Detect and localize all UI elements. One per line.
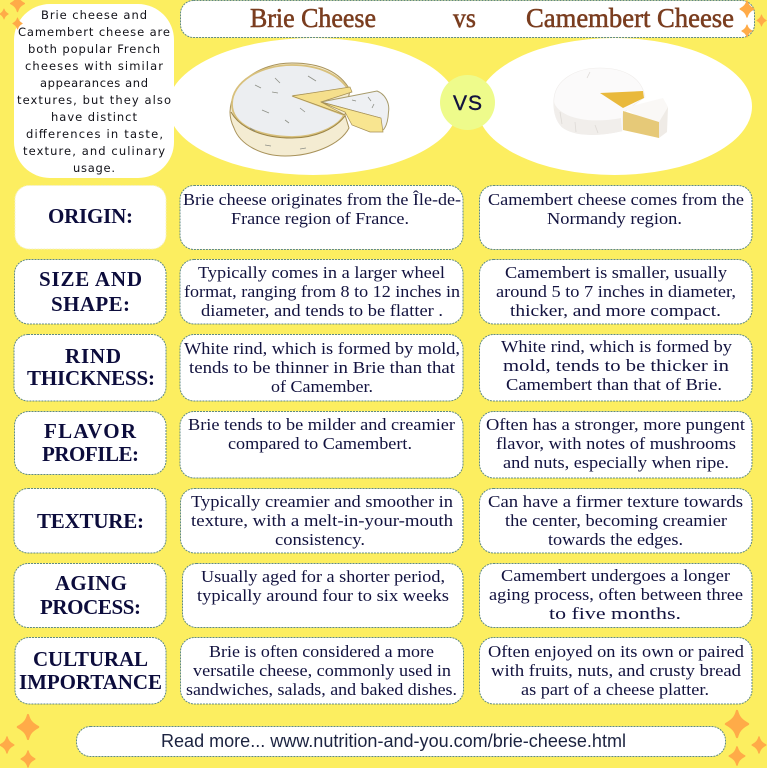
brie texture: consistency. [275,530,365,549]
brie flavor: Brie tends to be milder and creamier [188,415,456,434]
label: size and shape: SIZE AND [39,267,142,291]
panel: introduction: Camembert cheese are [18,25,170,39]
camembert flavor [480,412,752,478]
camembert culture [480,638,752,704]
row: cultural importance [15,638,752,704]
footer: read more link: Read more... www.nutrition-and-you.com/brie-cheese.html [161,731,626,751]
row: aging process [14,564,752,628]
label: texture: TEXTURE: [37,509,144,533]
camembert origin: Camembert cheese comes from the [488,190,744,209]
brie rind [180,334,463,401]
brie size: diameter, and tends to be flatter . [201,301,443,320]
sparkles: top right [740,1,766,37]
camembert texture: the center, becoming creamier [505,511,728,530]
label: size and shape: SHAPE: [51,292,130,316]
sparkles: bottom left [0,715,38,767]
brie origin [180,186,463,250]
camembert origin [480,186,752,250]
title bar: Brie Cheese [250,3,376,33]
panel: introduction: Brie cheese and [41,8,147,22]
panel: introduction: differences in taste, [26,127,163,141]
title bar [180,0,754,38]
camembert size: Camembert is smaller, usually [505,263,728,282]
panel: introduction: cheeses with similar [25,59,163,73]
illustration: brie wheel with wedge [230,63,389,156]
brie flavor: compared to Camembert. [228,434,412,453]
camembert size: around 5 to 7 inches in diameter, [496,282,736,301]
camembert culture: Often enjoyed on its own or paired [488,642,745,661]
brie culture [180,638,464,704]
title bar: vs [453,3,476,33]
panel: brie image ellipse [168,38,458,175]
brie rind: tends to be thinner in Brie than that [189,358,455,377]
brie rind: of Camember. [271,377,373,396]
camembert rind [480,334,752,401]
camembert origin: Normandy region. [547,209,682,228]
label: aging process [14,564,166,628]
brie culture: versatile cheese, commonly used in [193,661,451,680]
panel: camembert image ellipse [477,38,752,175]
brie size [180,260,463,324]
row: rind thickness [14,334,752,401]
label: aging process: AGING [55,571,127,595]
row: texture [14,488,752,553]
label: cultural importance [15,638,166,704]
camembert rind: White rind, which is formed by [501,337,733,356]
row: size and shape [14,260,752,324]
badge: VS circle [440,75,495,130]
camembert rind: Camembert than that of Brie. [506,375,722,394]
camembert flavor: and nuts, especially when ripe. [503,453,729,472]
sparkles: top left [0,0,24,29]
brie culture: Brie is often considered a more [209,642,434,661]
label: size and shape [14,260,166,324]
camembert flavor: flavor, with notes of mushrooms [496,434,736,453]
label: rind thickness: RIND [65,344,121,368]
camembert aging [480,564,752,628]
brie aging: typically around four to six weeks [197,586,449,605]
brie texture: texture, with a melt-in-your-mouth [191,511,454,530]
brie culture: sandwiches, salads, and baked dishes. [186,680,457,699]
label: rind thickness: THICKNESS: [27,366,155,390]
camembert aging: Camembert undergoes a longer [501,566,731,585]
brie texture: Typically creamier and smoother in [191,492,453,511]
panel: introduction: usage. [73,161,115,175]
label: cultural importance: CULTURAL [33,647,148,671]
row: flavor profile [14,412,752,478]
camembert texture: towards the edges. [548,530,683,549]
brie origin: France region of France. [231,209,409,228]
brie texture [180,488,463,553]
brie aging [182,564,463,628]
badge: VS circle: VS [453,92,482,115]
label: flavor profile [14,412,166,474]
brie aging: Usually aged for a shorter period, [201,567,445,586]
panel: introduction [14,4,174,178]
title bar: Camembert Cheese [526,3,734,33]
panel: introduction: texture, and culinary [23,144,165,158]
brie size: format, ranging from 8 to 12 inches in [184,282,460,301]
camembert flavor: Often has a stronger, more pungent [486,415,745,434]
brie rind: White rind, which is formed by mold, [184,339,460,358]
label: rind thickness [14,334,166,401]
sparkles: bottom right [726,711,766,765]
footer: read more link [76,726,726,756]
panel: introduction: textures, but they also [17,93,171,107]
row: origin [15,186,752,250]
label: origin: ORIGIN: [48,204,133,228]
brie origin: Brie cheese originates from the Île-de- [183,190,461,209]
label: flavor profile: FLAVOR [44,419,137,443]
camembert rind: mold, tends to be thicker in [503,356,729,375]
brie size: Typically comes in a larger wheel [198,263,445,282]
label: origin [15,186,166,249]
label: aging process: PROCESS: [40,595,141,619]
camembert culture: as part of a cheese platter. [521,680,709,699]
camembert aging: aging process, often between three [489,585,743,604]
panel: introduction: both popular French [28,42,160,56]
label: cultural importance: IMPORTANCE [19,670,162,694]
panel: introduction: appearances and [40,76,148,90]
camembert texture [480,488,752,553]
panel: introduction: have distinct [51,110,137,124]
brie flavor [180,412,463,478]
label: texture [14,488,166,553]
camembert culture: with fruits, nuts, and crusty bread [491,661,742,680]
camembert aging: to five months. [549,604,681,623]
camembert texture: Can have a firmer texture towards [488,492,743,511]
camembert size [480,260,752,324]
illustration: camembert wheel with wedge [554,68,668,138]
camembert size: thicker, and more compact. [510,301,721,320]
label: flavor profile: PROFILE: [42,442,139,466]
